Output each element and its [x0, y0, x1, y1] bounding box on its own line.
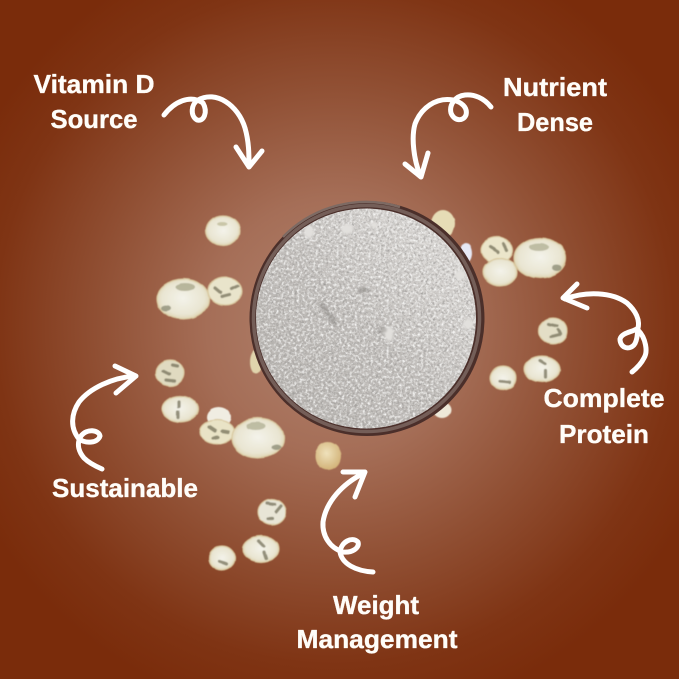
- label: Complete Protein: Complete: [544, 383, 664, 413]
- label: Sustainable: Sustainable: [52, 473, 198, 503]
- arrow: Vitamin D: [164, 97, 262, 167]
- seeds tucked behind the bowl: [250, 210, 472, 418]
- label: Vitamin D Source: [34, 69, 154, 134]
- seeds lower left: [156, 360, 198, 422]
- label: Nutrient Dense: [503, 72, 607, 137]
- seed cluster bottom left: [200, 407, 284, 458]
- seeds lower right: [490, 318, 567, 390]
- arrow: Nutrient Dense: [405, 95, 491, 177]
- powder fill: [254, 206, 478, 430]
- label: Nutrient Dense: Nutrient: [503, 72, 607, 102]
- seeds bottom: [209, 499, 286, 570]
- label: Nutrient Dense: Dense: [517, 107, 593, 137]
- label: Weight Management: Weight: [333, 590, 419, 620]
- seed cluster right: [481, 237, 566, 286]
- label: Vitamin D Source: Source: [50, 104, 138, 134]
- label: Complete Protein: [544, 383, 664, 449]
- seeds scattered around the bowl: [156, 210, 567, 570]
- label: Weight Management: Management: [296, 624, 458, 654]
- arrow: Weight Management: [323, 472, 373, 572]
- label: Vitamin D Source: Vitamin D: [34, 69, 154, 99]
- tan seed: [315, 442, 341, 470]
- seed top left: [206, 216, 240, 246]
- arrow: Complete Protein: [563, 284, 646, 372]
- arrow: Sustainable: [73, 366, 136, 469]
- powder bowl: [250, 201, 484, 436]
- seed cluster left: [157, 277, 242, 319]
- bowl rim: [250, 201, 484, 436]
- label: Weight Management: [296, 590, 458, 654]
- label: Complete Protein: Protein: [559, 419, 649, 449]
